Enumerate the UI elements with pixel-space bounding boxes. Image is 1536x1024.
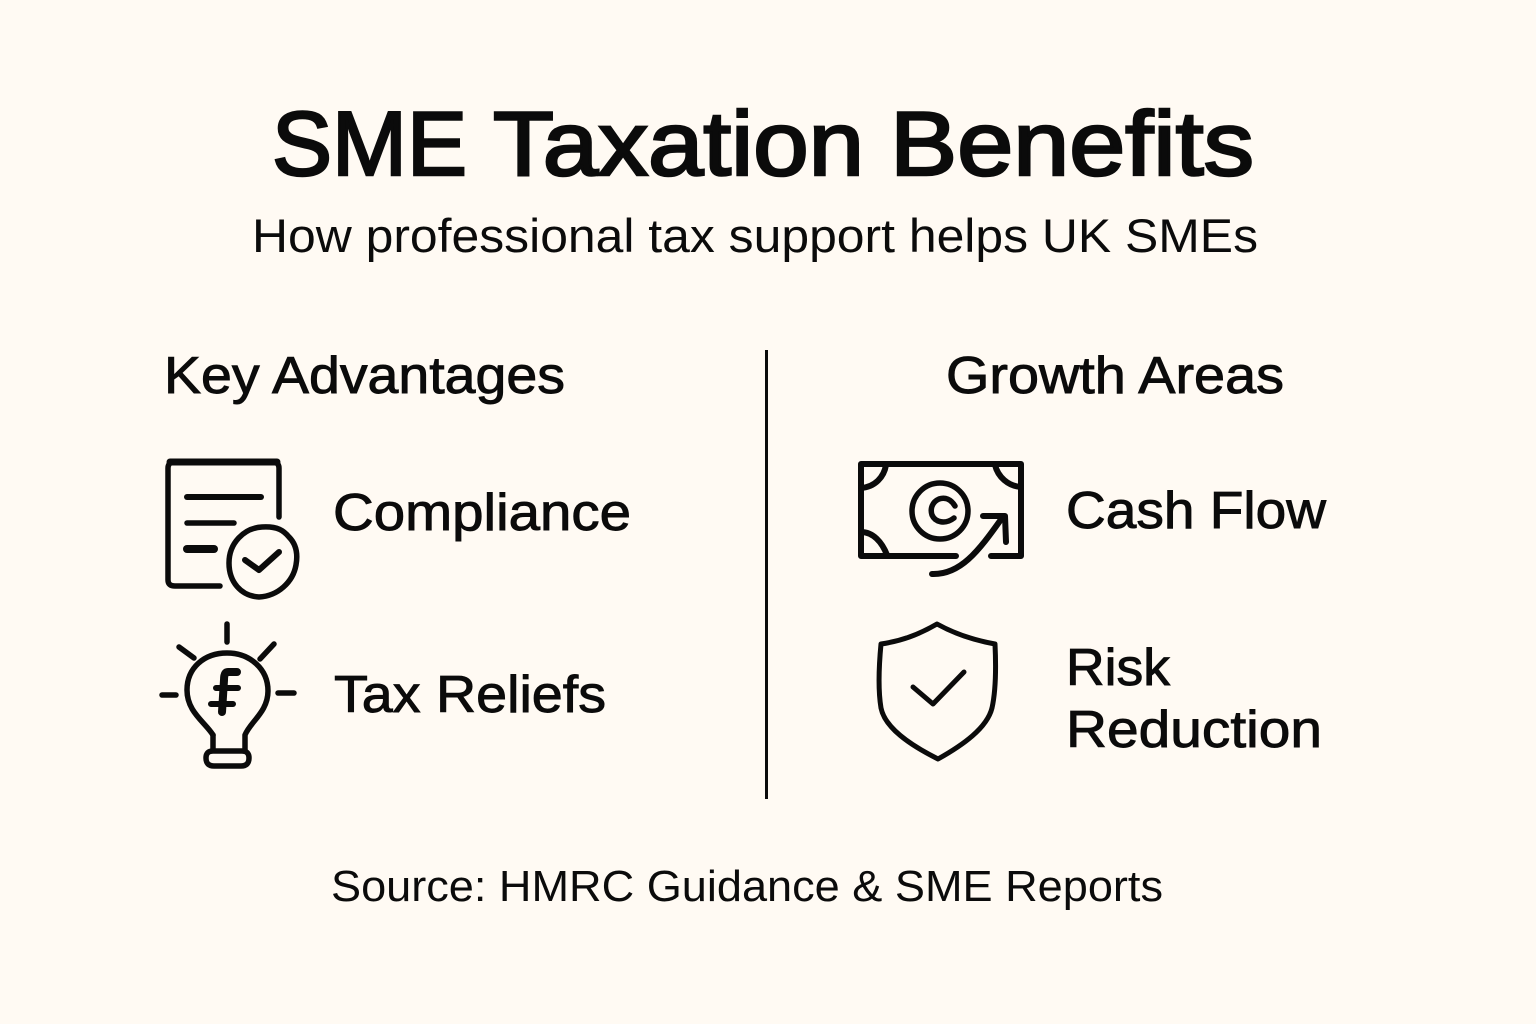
icon: light bulb with pound sign: [162, 624, 294, 766]
source note: Source: HMRC Guidance & SME Reports: [331, 862, 1163, 911]
label: compliance: Compliance: [333, 484, 631, 542]
icon: banknote with growth arrow: [861, 464, 1021, 574]
subtitle: How professional tax support helps UK SMEs: [252, 209, 1258, 262]
column divider: [765, 350, 768, 799]
title: Taxation: [493, 94, 864, 195]
title: [272, 94, 1254, 195]
icon: shield with check: [879, 624, 996, 759]
label: tax reliefs: Tax Reliefs: [334, 666, 606, 724]
title: SME: [272, 94, 467, 195]
heading: growth areas: Growth Areas: [946, 347, 1284, 405]
label: risk reduction: Risk: [1066, 639, 1171, 697]
label: cash flow: Cash Flow: [1066, 482, 1326, 540]
heading: key advantages: Key Advantages: [164, 347, 565, 405]
title: Benefits: [890, 94, 1254, 195]
label: risk reduction: [1066, 639, 1322, 759]
label: risk reduction: Reduction: [1066, 701, 1322, 759]
icon: compliance document with check badge: [168, 462, 297, 597]
